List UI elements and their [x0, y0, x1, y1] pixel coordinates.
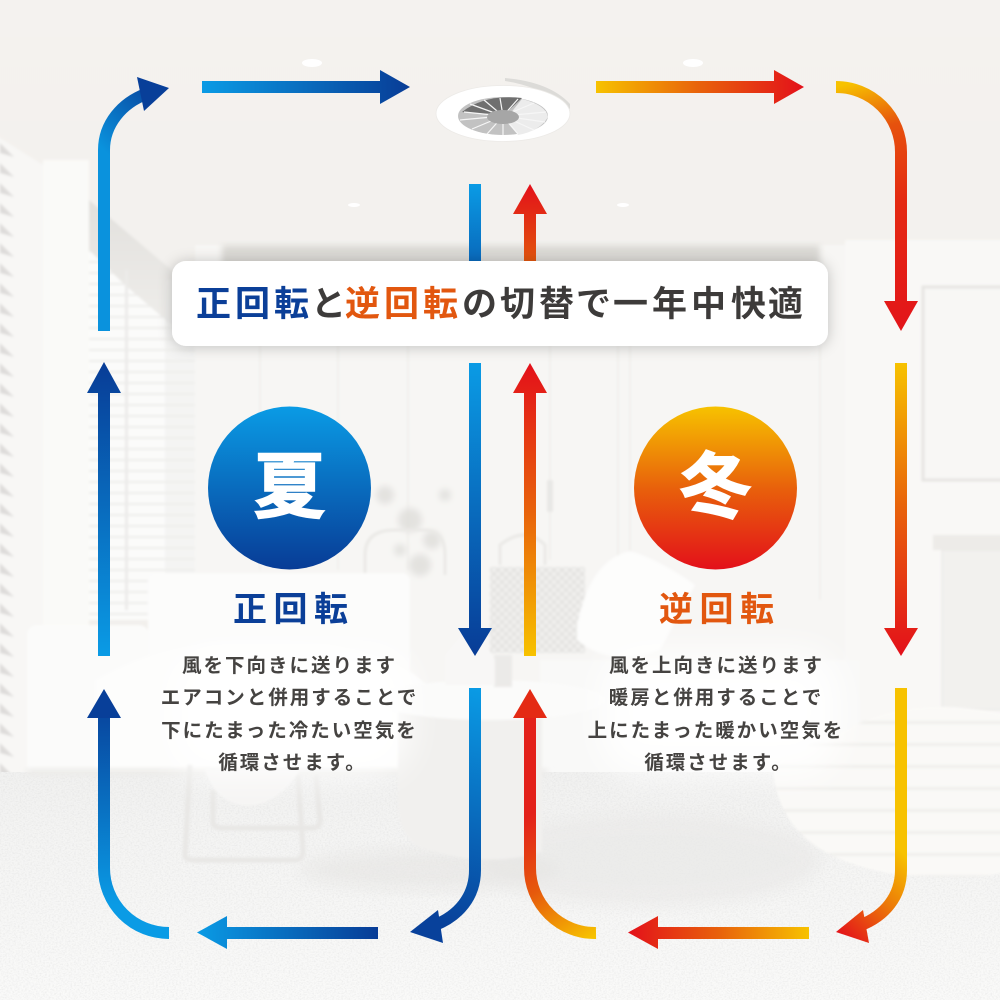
description: winter: 循環させます。 [644, 752, 793, 774]
soft white glow behind text [170, 650, 840, 775]
heading: reverse rotation: 逆回転 [659, 591, 780, 629]
ceiling fan [436, 78, 570, 142]
title text: と [311, 285, 346, 324]
arrow: blue top straight [202, 70, 410, 104]
icon: winter badge [634, 406, 797, 570]
arrow: red bottom straight [628, 916, 809, 949]
heading: forward rotation: 正回転 [233, 591, 354, 629]
panel: winter [588, 406, 844, 774]
description: winter: 暖房と併用することで [609, 687, 823, 709]
arrow: yellow-red right middle [884, 363, 918, 656]
arrow: red top straight [596, 70, 804, 104]
description: winter [588, 655, 844, 774]
arrow: red curved bottom-centre [513, 689, 596, 933]
title banner [172, 261, 828, 346]
icon: summer badge [208, 406, 371, 570]
arrow: blue centre top [469, 184, 481, 264]
title text: 正回転 [196, 285, 309, 324]
arrow: blue bottom straight [197, 916, 378, 949]
description: winter: 上にたまった暖かい空気を [588, 720, 844, 742]
arrow: red centre top [513, 184, 547, 264]
title text: 逆回転 [345, 285, 458, 324]
description: summer [161, 655, 418, 774]
icon: winter badge: 冬 [679, 448, 752, 528]
arrow: blue curved centre-bottom [410, 688, 475, 943]
title text: の切替で一年中快適 [462, 285, 803, 324]
arrow: red centre middle [513, 363, 547, 656]
arrow: blue left middle [87, 362, 121, 656]
description: summer: 風を下向きに送ります [182, 655, 397, 677]
ceiling lights [302, 59, 703, 207]
arrow: red curved top-right [836, 87, 918, 331]
arrow: blue centre middle [458, 363, 492, 656]
description: summer: 循環させます。 [218, 752, 367, 774]
icon: summer badge: 夏 [253, 448, 326, 528]
arrow: blue curved bottom-left [87, 689, 169, 933]
panel: summer [161, 406, 418, 774]
arrow: yellow-red curved bottom-right [836, 688, 901, 943]
description: summer: 下にたまった冷たい空気を [161, 720, 418, 742]
description: winter: 風を上向きに送ります [609, 655, 824, 677]
description: summer: エアコンと併用することで [161, 687, 418, 709]
arrow: blue curved top-left [104, 77, 169, 331]
